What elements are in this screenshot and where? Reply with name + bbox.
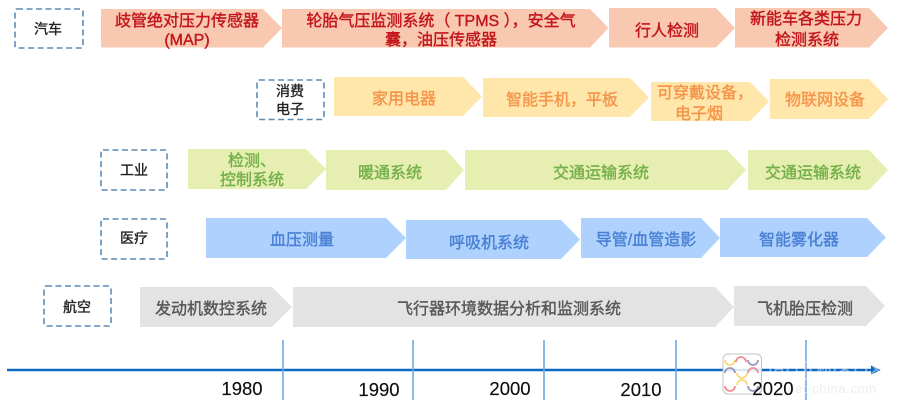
arrow: engine numerical control systems: 发动机数控系统: [155, 300, 267, 318]
row: aviation: [44, 286, 885, 327]
arrow: IoT devices: [770, 79, 888, 119]
arrow: transportation systems, latest: 交通运输系统: [765, 164, 861, 182]
arrow: aircraft tire pressure detection: 飞机胎压检测: [757, 300, 853, 318]
arrow: wearables and e-cigarettes: 可穿戴设备，: [657, 84, 753, 102]
arrow: aircraft environment data analysis and monitoring: [293, 287, 734, 327]
arrow: detection and control systems: 控制系统: [220, 171, 284, 189]
arrow: smart nebulizer: [720, 218, 886, 257]
arrow: wearables and e-cigarettes: [651, 82, 769, 123]
arrow: catheter and angiography: 导管/血管造影: [596, 231, 696, 249]
label: consumer electronics: 消费: [276, 83, 304, 99]
arrow: engine numerical control systems: [140, 287, 292, 327]
arrow: IoT devices: 物联网设备: [785, 91, 865, 109]
label: aviation: [44, 286, 111, 326]
watermark text: 面包板社区: [767, 357, 887, 384]
arrow: HVAC systems: [326, 150, 464, 190]
arrow: home appliances: [334, 77, 482, 116]
arrow: transportation systems, latest: [748, 150, 888, 190]
row: consumer electronics: [257, 77, 888, 123]
timeline: [7, 340, 879, 400]
arrow: TPMS, airbag and oil pressure sensors: 囊，油压传感器: [385, 31, 497, 49]
row: automotive: [15, 8, 888, 49]
arrow: ventilator systems: 呼吸机系统: [449, 234, 529, 252]
arrow: aircraft tire pressure detection: [734, 286, 885, 326]
year: 1980: 1980: [221, 378, 263, 399]
arrow: detection and control systems: [188, 149, 326, 189]
arrow: new energy vehicle pressure detection: 新能车各类压力: [750, 10, 862, 28]
row: industrial: [101, 149, 888, 190]
arrow: pedestrian detection: 行人检测: [635, 22, 699, 40]
arrow: wearables and e-cigarettes: 电子烟: [675, 105, 723, 123]
arrow: transportation systems: [465, 150, 746, 190]
arrow: ventilator systems: [406, 220, 580, 259]
label: consumer electronics: [257, 80, 324, 120]
watermark text: eet-china.com: [787, 381, 877, 396]
label: consumer electronics: 电子: [276, 101, 304, 117]
arrow: smartphones and tablets: 智能手机，平板: [506, 91, 618, 109]
arrow: blood pressure measurement: 血压测量: [270, 231, 334, 249]
arrow: new energy vehicle pressure detection: 检测系统: [775, 31, 839, 49]
year: 1990: 1990: [358, 379, 400, 400]
arrow: TPMS, airbag and oil pressure sensors: [282, 9, 608, 49]
watermark logo: [723, 354, 762, 394]
watermark: [723, 354, 887, 396]
arrow: MAP sensor: [101, 9, 282, 49]
label: industrial: 工业: [120, 162, 148, 178]
label: industrial: [101, 150, 167, 190]
label: aviation: 航空: [63, 299, 91, 315]
arrow: blood pressure measurement: [206, 218, 406, 258]
year: 2010: 2010: [620, 379, 662, 400]
arrow: TPMS, airbag and oil pressure sensors: 轮胎气压监测系统（ TPMS ），安全气: [306, 12, 576, 30]
arrow: MAP sensor: (MAP): [164, 32, 210, 49]
label: automotive: [15, 9, 83, 48]
label: automotive: 汽车: [34, 21, 62, 37]
arrow: HVAC systems: 暖通系统: [358, 164, 422, 182]
arrow: aircraft environment data analysis and monitoring: 飞行器环境数据分析和监测系统: [397, 299, 621, 318]
arrow: smartphones and tablets: [483, 78, 649, 117]
label: medical: 医疗: [120, 230, 148, 246]
arrow: catheter and angiography: [581, 218, 720, 258]
year: 2000: 2000: [489, 378, 531, 399]
arrow: transportation systems: 交通运输系统: [553, 164, 649, 182]
arrow: pedestrian detection: [609, 8, 735, 48]
arrow: smart nebulizer: 智能雾化器: [759, 231, 839, 249]
arrow: MAP sensor: 歧管绝对压力传感器: [115, 12, 259, 30]
row: medical: [101, 218, 886, 259]
label: medical: [101, 219, 167, 259]
arrow: home appliances: 家用电器: [372, 90, 436, 108]
arrow: new energy vehicle pressure detection: [735, 8, 888, 49]
year: 2020: 2020: [752, 378, 794, 399]
arrow: detection and control systems: 检测、: [228, 152, 276, 170]
watermark text: [767, 357, 887, 396]
arrowhead: [871, 366, 879, 374]
